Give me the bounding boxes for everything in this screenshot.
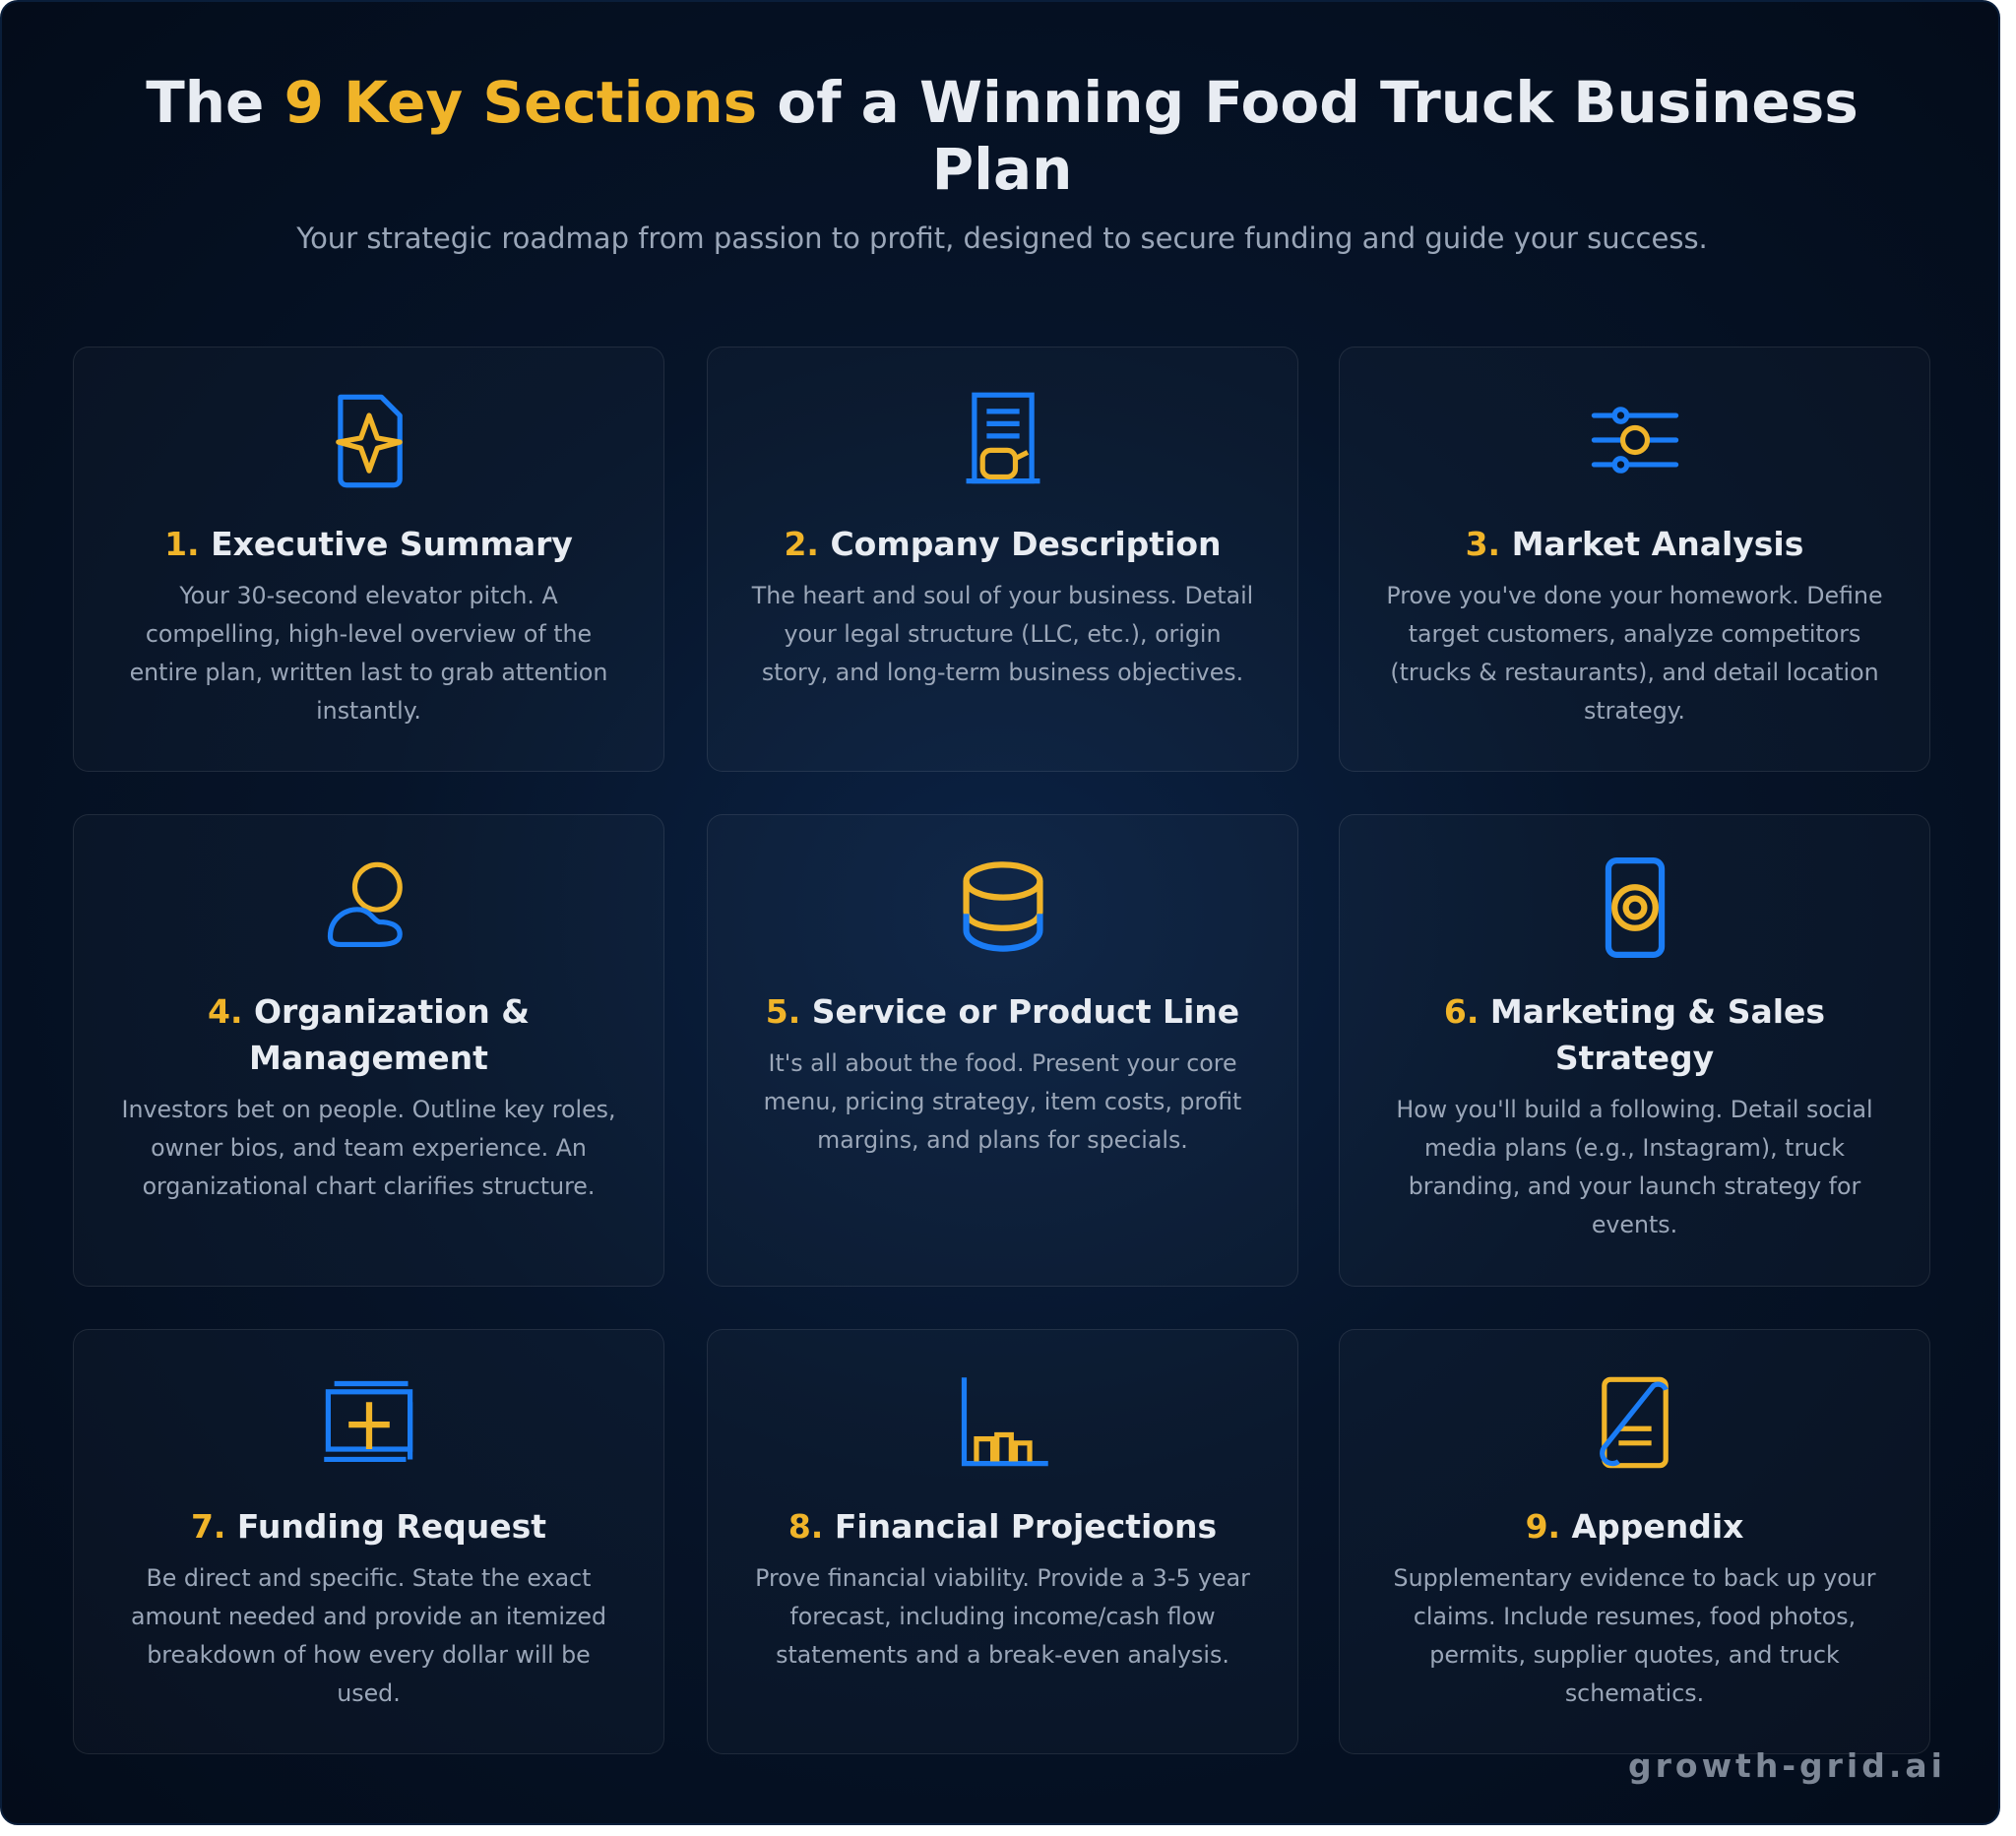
card 3: market analysis: 3. Market Analysis [1466,525,1803,563]
card 1: executive summary [73,347,664,772]
card 1: executive summary: Your 30-second elevator pitch. A compelling, high-level overview of the entire plan, written last to grab attention instantly. [130,582,607,725]
title: The 9 Key Sections of a Winning Food Truck Business Plan [146,69,1858,203]
card 2: company description: your legal structure (LLC, etc.), origin [784,620,1222,648]
card 8: financial projections: Prove financial viability. Provide a 3-5 year forecast, including income/cash flow statements and a break-even analysis. [755,1564,1250,1669]
card 9: appendix [1339,1329,1930,1754]
card 1: executive summary: 1. Executive Summary [164,525,573,563]
card 9: appendix: 9. Appendix [1526,1507,1743,1546]
icon: person [327,862,403,947]
icon: money plus [324,1380,413,1462]
card 2: company description: 2. Company Description [784,525,1222,563]
icon: chart [961,1377,1048,1467]
card 6: marketing: How you'll build a following. Detail social media plans (e.g., Instagram), truck branding, and your launch strategy for events. [1396,1096,1873,1238]
watermark: growth-grid.ai [1628,1746,1946,1785]
card 3: market analysis: Prove you've done your homework. Define target customers, analyze competitors (trucks & restaurants), and detail location strategy. [1386,582,1883,725]
card 4: organization [73,814,664,1287]
card 8: financial projections: 8. Financial Projections [788,1507,1217,1546]
icon: cylinder [963,861,1043,952]
icon: document star [336,394,403,488]
card 8: financial projections [707,1329,1298,1754]
card 4: organization: 4. Organization & Management [208,992,530,1077]
card 6: marketing [1339,814,1930,1287]
card 6: marketing: 6. Marketing & Sales Strategy [1444,992,1825,1077]
subtitle: Your strategic roadmap from passion to profit, designed to secure funding and guide your success. [296,222,1708,255]
card 7: funding: Be direct and specific. State the exact amount needed and provide an itemized breakdown of how every dollar will be used. [131,1564,606,1707]
card 4: organization: Investors bet on people. Outline key roles, owner bios, and team experience. An organizational chart clarifies structure. [121,1096,616,1200]
card 2: company description [707,347,1298,772]
icon: sliders [1591,407,1679,474]
card 5: product line: It's all about the food. Present your core menu, pricing strategy, item costs, profit margins, and plans for specials. [764,1049,1241,1154]
card 2: company description: The heart and soul of your business. Detail [752,582,1253,609]
card 2: company description: story, and long-term business objectives. [762,659,1243,686]
card 5: product line [707,814,1298,1287]
card 3: market analysis [1339,347,1930,772]
icon: clip document [1600,1376,1669,1469]
card 5: product line: 5. Service or Product Line [766,992,1239,1031]
card 7: funding: 7. Funding Request [191,1507,546,1546]
card 9: appendix: Supplementary evidence to back up your claims. Include resumes, food photos, permits, supplier quotes, and truck schematics. [1394,1564,1875,1707]
card 7: funding [73,1329,664,1754]
icon: phone target [1605,857,1666,958]
icon: building [967,392,1040,484]
